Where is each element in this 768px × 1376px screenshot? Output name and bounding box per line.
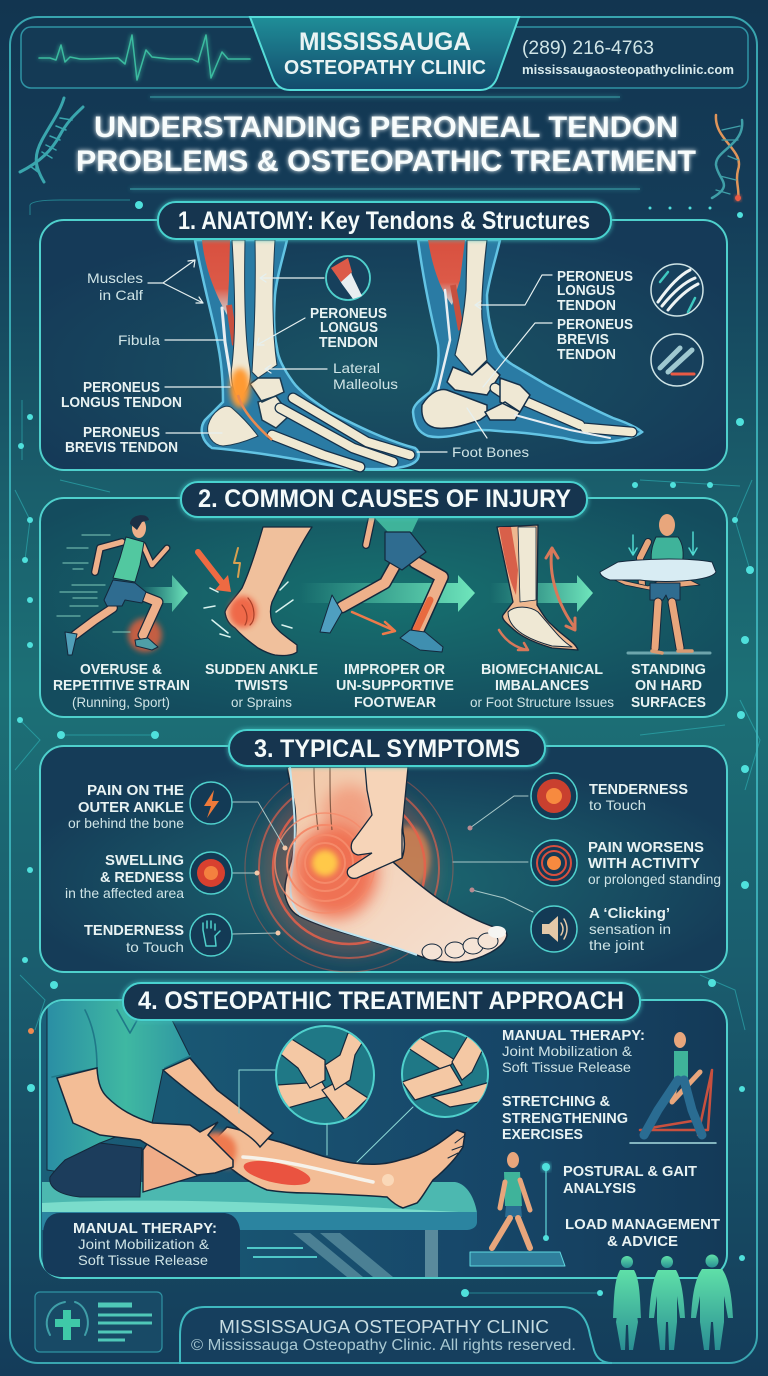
footer plaque: MISSISSAUGA OSTEOPATHY CLINIC <box>219 1317 549 1337</box>
icon: tendon tear <box>651 334 703 386</box>
anatomy labels: LONGUS <box>320 320 378 336</box>
icon: body silhouettes <box>613 1254 733 1350</box>
symptom labels right <box>588 782 721 953</box>
causes labels: STANDING <box>631 662 706 678</box>
header centre plaque <box>250 17 519 90</box>
icon: speaker <box>531 906 577 952</box>
anatomy labels: BREVIS <box>557 332 609 348</box>
symptom labels right: WITH ACTIVITY <box>588 856 700 872</box>
illustration: standing figure <box>600 514 716 653</box>
symptom labels right: PAIN WORSENS <box>588 840 704 856</box>
icon: DNA helix left <box>20 98 83 182</box>
icon: tendon fibres <box>651 264 703 316</box>
footer plaque <box>180 1307 612 1363</box>
anatomy labels: Foot Bones <box>452 444 529 460</box>
heading: anatomy: 1. ANATOMY: Key Tendons & Structures <box>178 207 590 235</box>
symptom labels left: to Touch <box>126 939 184 955</box>
anatomy labels: Muscles <box>87 270 143 286</box>
illustration: left foot skeleton <box>195 240 419 469</box>
anatomy labels: LONGUS <box>557 283 615 299</box>
icon: tenderness <box>531 773 577 819</box>
illustration: right foot skeleton <box>413 240 642 443</box>
treatment labels: Joint Mobilization & <box>502 1043 633 1059</box>
causes labels <box>53 662 706 711</box>
causes labels: IMBALANCES <box>495 678 589 694</box>
icon: hand <box>190 914 232 956</box>
symptom labels left: in the affected area <box>65 885 184 901</box>
panel: causes <box>40 482 727 717</box>
anatomy labels: LONGUS TENDON <box>61 395 182 411</box>
icon: activity pain <box>531 840 577 886</box>
symptom labels right: TENDERNESS <box>589 782 688 798</box>
heading: symptoms: 3. TYPICAL SYMPTOMS <box>254 735 520 763</box>
anatomy labels: PERONEUS <box>83 380 160 396</box>
illustration: exercise figure <box>630 1032 716 1143</box>
illustration: therapist and leg <box>47 1000 465 1208</box>
causes labels: or Sprains <box>231 694 292 710</box>
icon: lightning <box>190 782 232 824</box>
footer logo card <box>35 1292 162 1352</box>
title: UNDERSTANDING PERONEAL TENDON <box>94 111 678 144</box>
symptom labels left <box>65 783 184 955</box>
symptom labels right: A ‘Clicking’ <box>589 906 670 922</box>
clinic name: MISSISSAUGA <box>299 28 471 56</box>
symptom labels left: & REDNESS <box>100 870 184 886</box>
treatment labels: STRETCHING & <box>502 1094 611 1110</box>
inset: manual therapy hands <box>276 1026 374 1124</box>
anatomy labels: TENDON <box>557 347 616 363</box>
panel: treatment <box>40 983 727 1278</box>
causes labels: IMPROPER OR <box>344 662 446 678</box>
pain rings <box>245 764 453 972</box>
causes labels: ON HARD <box>635 678 702 694</box>
contact details <box>522 38 734 77</box>
contact details: mississaugaosteopathyclinic.com <box>522 62 734 77</box>
anatomy labels: TENDON <box>319 335 378 351</box>
icon: redness <box>190 852 232 894</box>
causes labels: SUDDEN ANKLE <box>205 662 318 678</box>
footer plaque: © Mississauga Osteopathy Clinic. All rights reserved. <box>191 1337 576 1354</box>
header bar <box>21 17 748 90</box>
treatment labels: & ADVICE <box>607 1234 678 1250</box>
anatomy labels: BREVIS TENDON <box>65 440 178 456</box>
anatomy labels: PERONEUS <box>557 269 633 285</box>
contact details: (289) 216-4763 <box>522 38 654 59</box>
arrows: flow <box>142 575 593 612</box>
heading: symptoms <box>229 730 545 766</box>
illustration: twisted ankle <box>198 527 312 656</box>
causes labels: (Running, Sport) <box>72 694 170 710</box>
treatment labels: ANALYSIS <box>563 1181 636 1197</box>
symptom labels right: sensation in <box>589 921 671 937</box>
anatomy labels: TENDON <box>557 298 616 314</box>
causes labels: REPETITIVE STRAIN <box>53 678 190 694</box>
symptom labels left: PAIN ON THE <box>87 783 184 799</box>
heading: treatment: 4. OSTEOPATHIC TREATMENT APPROACH <box>138 987 624 1015</box>
icon: tendon inset <box>326 256 370 300</box>
title: PROBLEMS & OSTEOPATHIC TREATMENT <box>76 145 696 178</box>
anatomy labels: Fibula <box>118 332 160 348</box>
symptom labels left: or behind the bone <box>68 815 184 831</box>
symptom labels right: the joint <box>589 937 644 953</box>
heading: causes: 2. COMMON CAUSES OF INJURY <box>198 485 571 513</box>
treatment caption box <box>43 1213 240 1277</box>
illustration: runner <box>57 515 167 655</box>
treatment labels: STRENGTHENING <box>502 1111 628 1127</box>
treatment caption box: Joint Mobilization & <box>78 1236 210 1252</box>
causes labels: FOOTWEAR <box>354 695 437 711</box>
inset connectors <box>239 1070 413 1162</box>
symptom connectors <box>232 796 533 934</box>
symptom labels left: TENDERNESS <box>84 923 184 939</box>
anatomy labels: Malleolus <box>333 376 398 392</box>
anatomy leader lines <box>148 260 552 452</box>
symptom labels left: SWELLING <box>105 853 184 869</box>
treatment labels <box>502 1028 720 1250</box>
heading: anatomy <box>158 202 611 239</box>
causes labels: BIOMECHANICAL <box>481 662 603 678</box>
anatomy labels: PERONEUS <box>310 306 387 322</box>
illustration: treatment table <box>42 1182 477 1277</box>
treatment labels: MANUAL THERAPY: <box>502 1028 645 1044</box>
treatment labels: POSTURAL & GAIT <box>563 1164 697 1180</box>
inset: ankle mobilisation <box>402 1031 490 1117</box>
glowing dividers <box>130 97 640 189</box>
symptom labels left: OUTER ANKLE <box>78 800 184 816</box>
anatomy labels: PERONEUS <box>83 425 160 441</box>
treatment labels: LOAD MANAGEMENT <box>565 1217 720 1233</box>
symptom labels right: to Touch <box>589 797 646 813</box>
symptom labels right: or prolonged standing <box>588 871 721 887</box>
causes labels: SURFACES <box>631 695 706 711</box>
causes labels: UN-SUPPORTIVE <box>336 678 454 694</box>
icon: heartbeat line <box>39 35 250 80</box>
treatment labels: EXERCISES <box>502 1127 583 1143</box>
connector nodes <box>254 826 474 936</box>
illustration: footwear runner <box>320 515 443 652</box>
anatomy labels: Lateral <box>333 360 380 376</box>
header frame <box>21 27 748 88</box>
clinic name <box>284 28 486 79</box>
causes labels: OVERUSE & <box>80 662 162 678</box>
illustration: gait figure on platform <box>470 1152 565 1266</box>
illustration: biomechanical leg <box>497 525 578 650</box>
treatment labels: Soft Tissue Release <box>502 1059 631 1075</box>
title <box>76 111 696 178</box>
panel: symptoms <box>40 730 727 972</box>
anatomy labels <box>61 269 633 460</box>
anatomy labels: PERONEUS <box>557 317 633 333</box>
anatomy labels: in Calf <box>99 287 143 303</box>
icon: DNA helix right <box>712 115 742 201</box>
causes labels: TWISTS <box>235 678 288 694</box>
panel: anatomy <box>40 202 727 470</box>
treatment caption box: Soft Tissue Release <box>78 1252 208 1268</box>
clinic name: OSTEOPATHY CLINIC <box>284 57 486 79</box>
treatment caption box: MANUAL THERAPY: <box>73 1221 217 1237</box>
causes labels: or Foot Structure Issues <box>470 694 614 710</box>
illustration: ankle held by hand <box>275 767 507 962</box>
